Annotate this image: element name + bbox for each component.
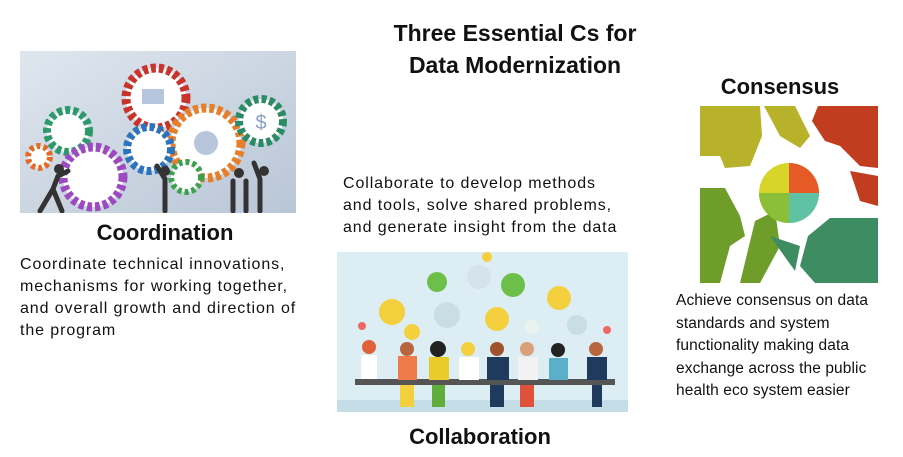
heading: Collaboration: Collaboration (409, 424, 551, 449)
title: Three Essential Cs for (394, 20, 636, 46)
text: consensus description: functionality making data (676, 337, 849, 354)
text: collaboration description: Collaborate to develop methods (343, 175, 596, 192)
image: coordination gears (20, 51, 296, 213)
text: coordination description: Coordinate technical innovations, (20, 256, 285, 273)
text: coordination description: mechanisms for working together, (20, 278, 288, 295)
text: collaboration description (343, 175, 617, 236)
heading: Consensus: Consensus (721, 74, 839, 99)
text: coordination description: and overall growth and direction of (20, 300, 296, 317)
text: consensus description: Achieve consensus on data (676, 292, 868, 309)
text: consensus description: standards and system (676, 314, 830, 332)
text: coordination description (20, 256, 296, 339)
text: consensus description: health eco system easier (676, 382, 850, 399)
image: collaboration meeting (337, 252, 628, 412)
heading: Coordination: Coordination (97, 220, 233, 245)
text: collaboration description: and tools, solve shared problems, (343, 197, 612, 214)
title: Data Modernization (409, 52, 621, 78)
image: consensus puzzle (700, 106, 878, 283)
image: coordination gears: $ (255, 112, 267, 134)
text: coordination description: the program (20, 322, 116, 339)
text: consensus description (676, 292, 868, 399)
text: collaboration description: and generate insight from the data (343, 219, 617, 236)
text: consensus description: exchange across the public (676, 360, 866, 376)
title (394, 20, 636, 78)
